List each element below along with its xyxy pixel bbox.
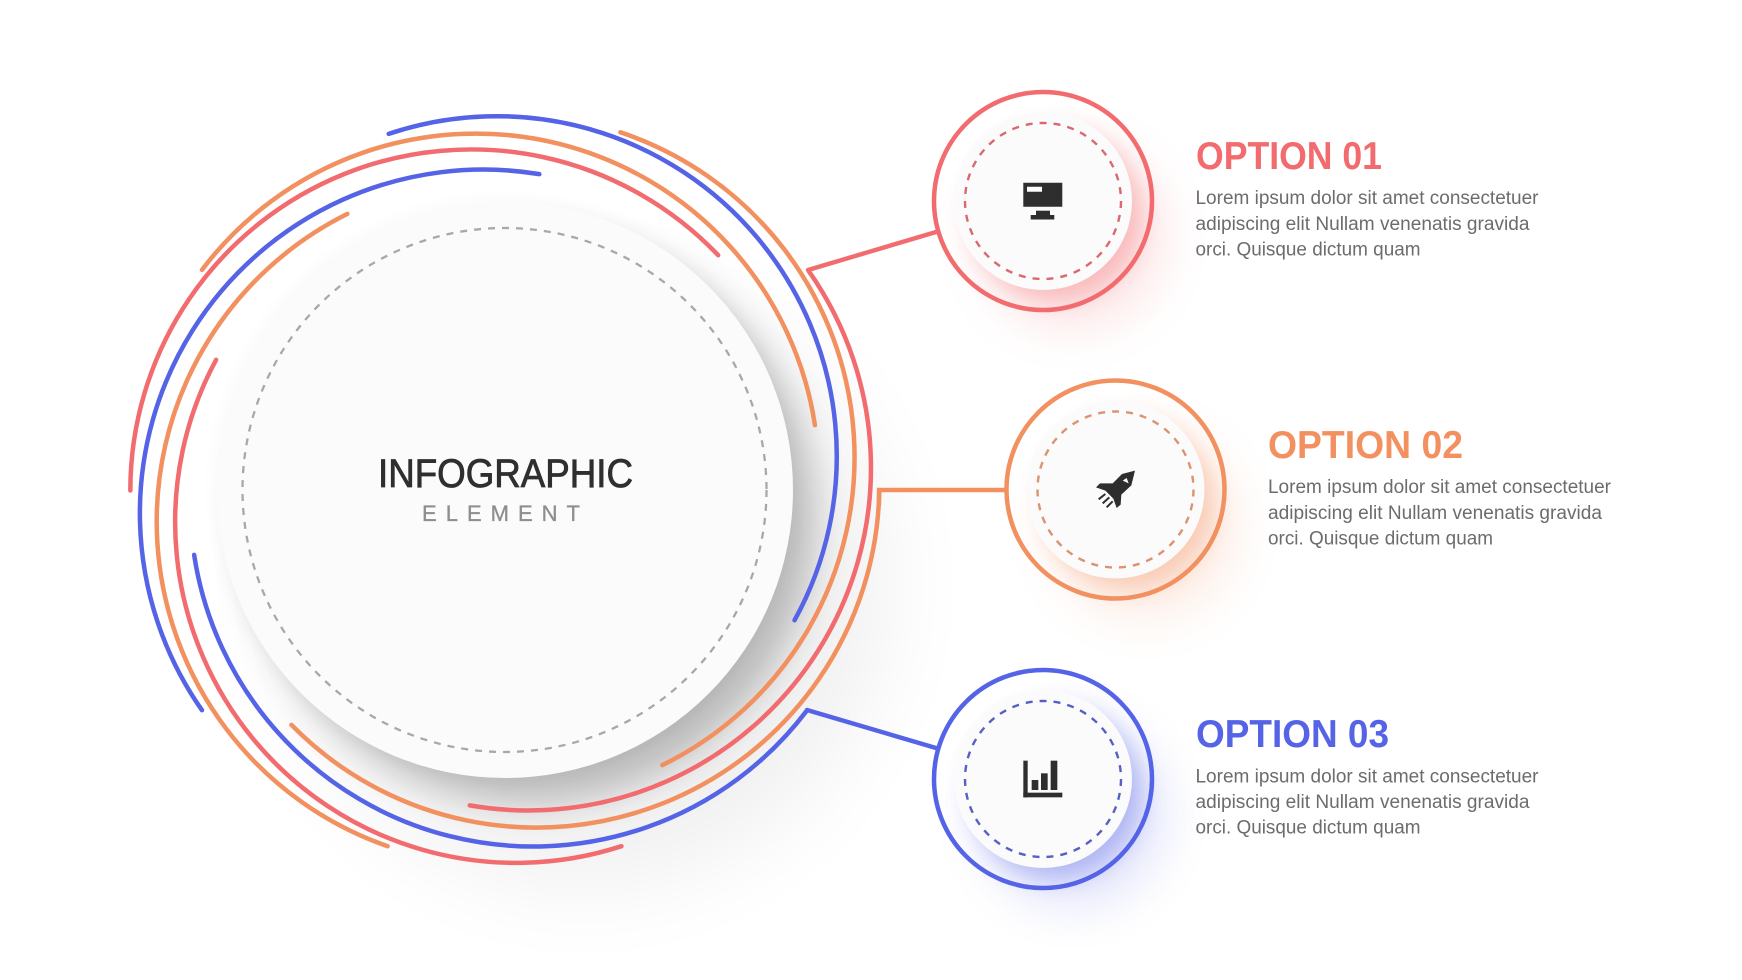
body: option 01	[1196, 188, 1539, 260]
heading: option 02: OPTION 02	[1268, 424, 1463, 467]
body: option 03: orci. Quisque dictum quam	[1196, 818, 1420, 838]
panel: main circle	[213, 198, 885, 885]
connector: option 03	[807, 710, 936, 748]
main white disc	[217, 202, 793, 778]
connector: option 02	[879, 490, 1006, 505]
icon: monitor	[1023, 183, 1062, 220]
body: option 02: adipiscing elit Nullam venenatis gravida	[1268, 503, 1602, 524]
text block: option 01	[1196, 135, 1539, 260]
body: option 02: Lorem ipsum dolor sit amet consectetuer	[1268, 477, 1612, 498]
heading: option 03: OPTION 03	[1196, 713, 1389, 756]
text block: option 03	[1196, 713, 1539, 838]
icon: bar chart	[1023, 761, 1062, 797]
body: option 01: adipiscing elit Nullam venenatis gravida	[1196, 214, 1530, 235]
main dashed circle	[242, 228, 766, 752]
connector: option 01	[808, 232, 936, 270]
panel: option 02 circle	[1006, 380, 1241, 621]
subtitle: element: ELEMENT	[422, 501, 580, 526]
text block: option 02	[1268, 424, 1612, 550]
heading: option 01: OPTION 01	[1196, 135, 1382, 178]
body: option 03	[1196, 766, 1539, 838]
title: infographic: INFOGRAPHIC	[378, 452, 633, 496]
body: option 03: adipiscing elit Nullam venenatis gravida	[1196, 792, 1530, 813]
main disc shadow	[213, 198, 885, 885]
body: option 03: Lorem ipsum dolor sit amet consectetuer	[1196, 766, 1539, 788]
body: option 02: orci. Quisque dictum quam	[1268, 528, 1493, 550]
body: option 02	[1268, 477, 1612, 550]
body: option 01: orci. Quisque dictum quam	[1196, 240, 1420, 260]
decorative concentric arcs	[130, 116, 879, 863]
panel: option 01 circle	[934, 92, 1169, 332]
icon: rocket	[1096, 471, 1135, 508]
panel: option 03 circle	[934, 670, 1169, 910]
body: option 01: Lorem ipsum dolor sit amet consectetuer	[1196, 188, 1539, 209]
